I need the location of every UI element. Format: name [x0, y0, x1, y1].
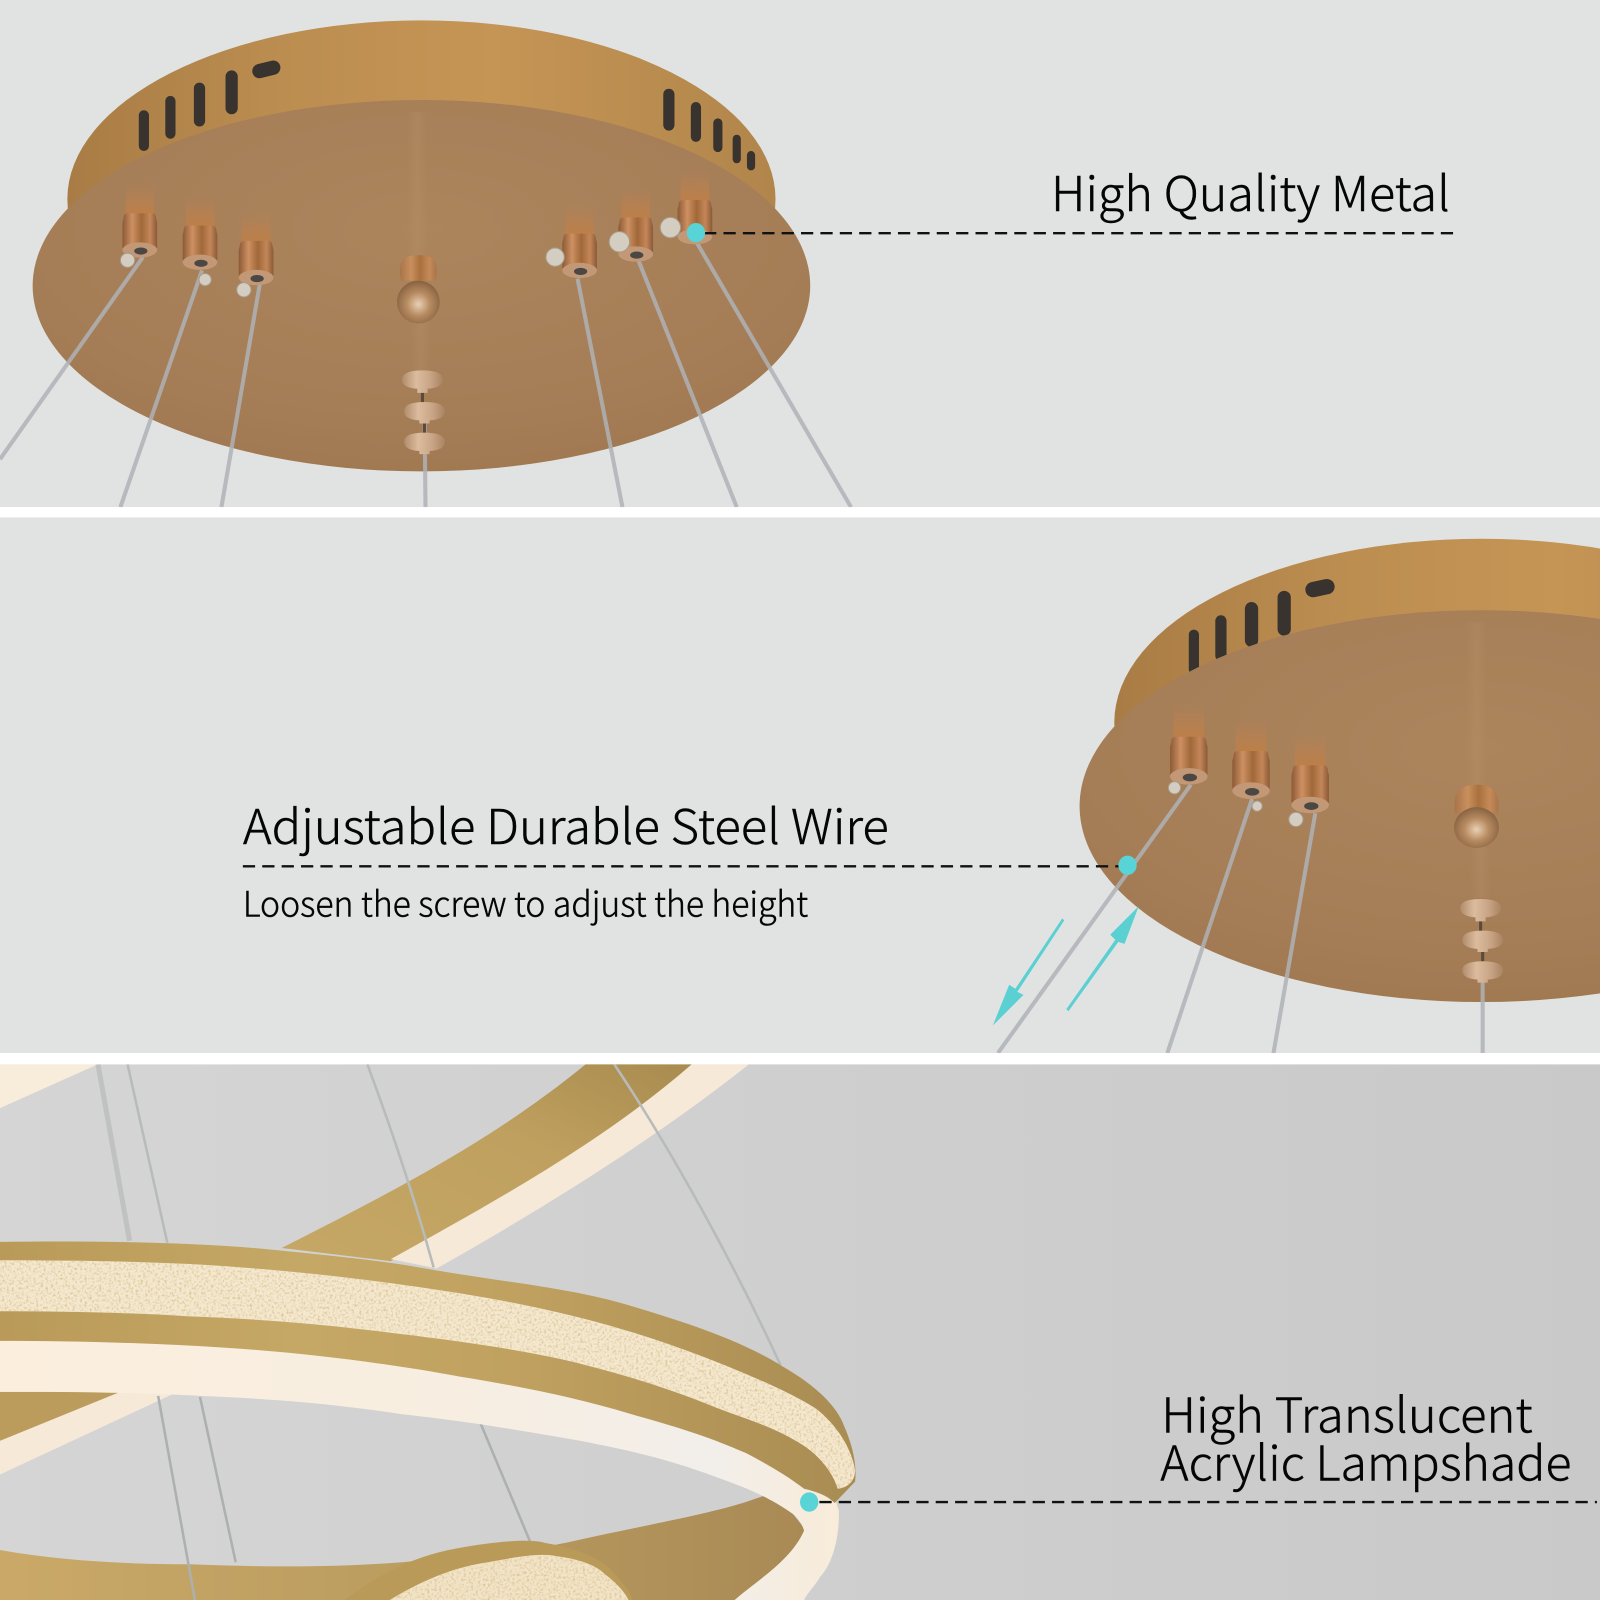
panel: adjustable steel wire	[0, 517, 1600, 1053]
vent slots	[139, 59, 755, 170]
heading line two: Acrylic Lampshade	[1160, 1425, 1571, 1495]
back ring acrylic band	[391, 1064, 749, 1268]
callout: acrylic lampshade	[800, 1377, 1597, 1512]
heading: High Quality Metal	[1051, 155, 1450, 225]
plate sheen streak	[1466, 622, 1491, 898]
plate sheen streaks	[407, 112, 431, 374]
hanging cables lower	[158, 1396, 531, 1600]
callout: high quality metal	[687, 155, 1455, 242]
callout: steel wire	[243, 788, 1137, 926]
leader line	[704, 232, 1455, 234]
sub text: Loosen the screw to adjust the height	[243, 876, 808, 926]
marker dot	[800, 1492, 818, 1512]
far ring acrylic corner	[0, 1064, 98, 1108]
hanging cables upper	[98, 1064, 781, 1365]
main ring crystal band	[0, 1260, 855, 1489]
canopy side wall	[1114, 539, 1600, 906]
back ring gold band	[282, 1064, 692, 1261]
centre wire stops	[1460, 899, 1503, 983]
suspension wires	[0, 243, 851, 507]
main ring gold frame	[0, 1242, 856, 1503]
centre wire stops	[402, 370, 445, 454]
lower left ring fragment	[0, 1392, 178, 1474]
white divider bands	[0, 507, 1600, 1064]
arrow: wire lowers	[993, 918, 1064, 1026]
leader line	[819, 1501, 1597, 1503]
centre ball finial	[397, 255, 440, 323]
heading: High Translucent	[1161, 1377, 1533, 1447]
copper wire sockets	[1168, 704, 1329, 827]
arrow: wire raises	[1066, 906, 1139, 1011]
marker dot	[687, 223, 705, 242]
canopy side wall	[67, 20, 776, 378]
smallest ring	[345, 1541, 633, 1600]
leader line	[243, 865, 1122, 868]
marker dot	[1118, 856, 1137, 875]
canopy underside plate	[33, 100, 810, 471]
centre ball finial	[1454, 785, 1499, 848]
suspension wires	[998, 785, 1483, 1053]
heading: Adjustable Durable Steel Wire	[243, 788, 889, 858]
panel: high quality metal	[0, 0, 1600, 507]
vent slots	[1189, 578, 1336, 674]
canopy underside plate	[1080, 610, 1600, 1002]
copper wire sockets	[120, 169, 712, 297]
panel: acrylic lampshade	[0, 1064, 1600, 1600]
main ring acrylic lampshade	[0, 1316, 839, 1600]
lower ring gold band	[0, 1492, 806, 1600]
